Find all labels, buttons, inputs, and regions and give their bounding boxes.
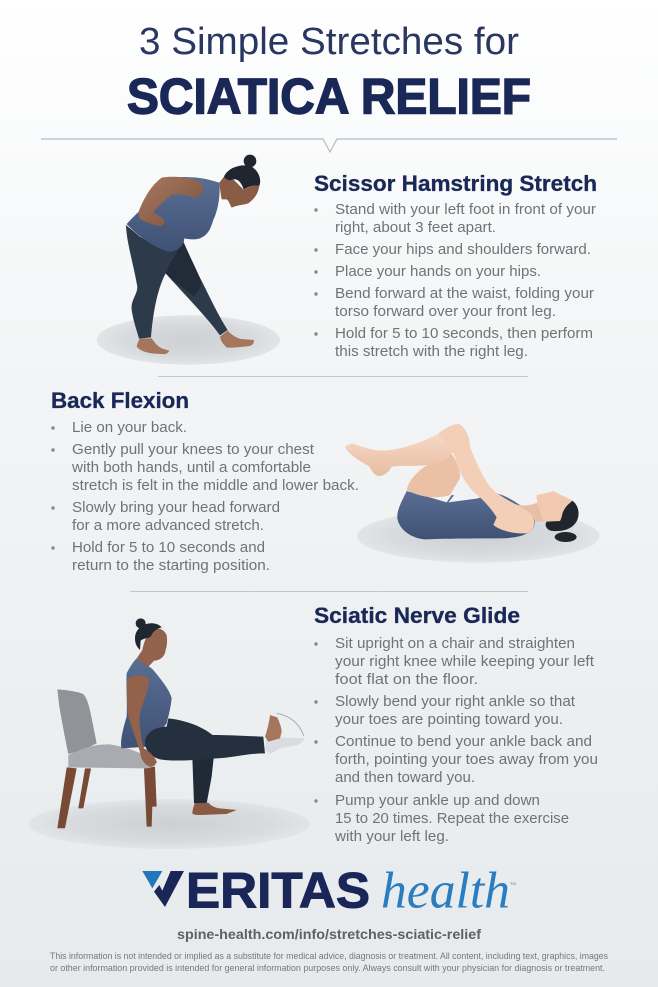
panel: back flexion — [51, 388, 600, 574]
panel: scissor hamstring stretch — [97, 155, 597, 365]
illustration: standing forward bend — [97, 155, 280, 365]
bullet list: forth, pointing your toes away from you — [335, 752, 598, 768]
icon: check mark V — [142, 871, 184, 907]
wordmark italic: health — [381, 863, 510, 920]
bullet list — [314, 202, 596, 360]
bullet list: for a more advanced stretch. — [72, 518, 264, 534]
bullet list: Pump your ankle up and down — [335, 793, 540, 809]
bullet list — [51, 420, 359, 574]
bullet list: right, about 3 feet apart. — [335, 220, 496, 236]
bullet list: Lie on your back. — [72, 420, 187, 436]
bullet list: Continue to bend your ankle back and — [335, 734, 592, 750]
bullet list: stretch is felt in the middle and lower back. — [72, 478, 359, 494]
heading: Sciatic Nerve Glide — [314, 603, 520, 628]
bullet list: Face your hips and shoulders forward. — [335, 242, 591, 258]
bullet list: Gently pull your knees to your chest — [72, 442, 314, 458]
logo: Veritas Health — [142, 863, 516, 920]
illustration: seated ankle pump on chair — [29, 618, 310, 849]
title — [127, 21, 531, 124]
bullet list: Bend forward at the waist, folding your — [335, 286, 594, 302]
bullet list: with your left leg. — [334, 829, 449, 845]
trademark: TM — [510, 881, 516, 886]
heading: Back Flexion — [51, 388, 189, 413]
disclaimer: or other information provided is intended for general information purposes only. Always consult with your physician for diagnosis or treatment. — [50, 963, 605, 973]
source url: spine-health.com/info/stretches-sciatic-relief — [177, 926, 481, 942]
heading: Scissor Hamstring Stretch — [314, 171, 597, 196]
bullet list: with both hands, until a comfortable — [71, 460, 311, 476]
title line 2: SCIATICA RELIEF — [127, 68, 531, 124]
bullet list — [314, 636, 598, 845]
bullet list: this stretch with the right leg. — [335, 344, 528, 360]
panel: sciatic nerve glide — [29, 603, 598, 849]
bullet list: and then toward you. — [335, 770, 475, 786]
bullet list: 15 to 20 times. Repeat the exercise — [335, 811, 569, 827]
bullet list: foot flat on the floor. — [335, 672, 478, 688]
bullet list: Hold for 5 to 10 seconds, then perform — [335, 326, 593, 342]
bullet list: your toes are pointing toward you. — [335, 712, 563, 728]
disclaimer: This information is not intended or implied as a substitute for medical advice, diagnosis or treatment. All content, including text, graphics, images — [50, 951, 608, 961]
bullet list: Stand with your left foot in front of your — [335, 202, 596, 218]
wordmark: ERITAS — [186, 863, 370, 919]
bullet list: your right knee while keeping your left — [335, 654, 594, 670]
bullet list: Slowly bend your right ankle so that — [335, 694, 575, 710]
bullet list: Hold for 5 to 10 seconds and — [72, 540, 265, 556]
bullet list: Slowly bring your head forward — [72, 500, 280, 516]
bullet list: return to the starting position. — [72, 558, 270, 574]
bullet list: Place your hands on your hips. — [335, 264, 541, 280]
title line 1: 3 Simple Stretches for — [139, 21, 519, 63]
illustration: lying knees to chest — [345, 424, 600, 563]
bullet list: torso forward over your front leg. — [335, 304, 556, 320]
bullet list: Sit upright on a chair and straighten — [335, 636, 575, 652]
disclaimer — [50, 951, 608, 973]
